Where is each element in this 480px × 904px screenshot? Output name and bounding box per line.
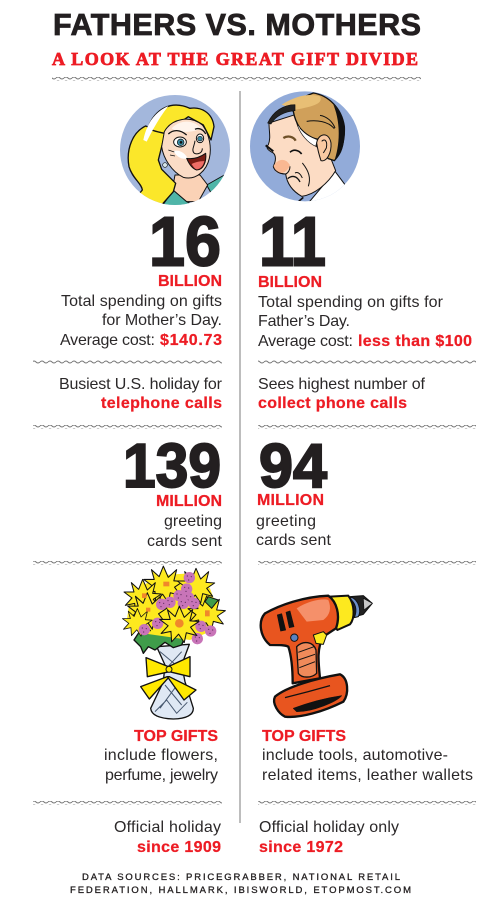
- data sources: FEDERATION, HALLMARK, IBISWORLD, ETOPMOST.COM: [70, 885, 411, 896]
- stat: father spending: Total spending on gifts for: [258, 294, 444, 311]
- stat: father spending: 11: [259, 202, 326, 280]
- text: father top gifts: TOP GIFTS: [262, 728, 346, 745]
- stat: father spending: less than $100: [358, 333, 472, 350]
- text: mother official holiday: Official holiday: [114, 819, 221, 836]
- text: father phone calls: collect phone calls: [258, 395, 407, 412]
- stat: mother greeting cards: [123, 432, 223, 550]
- stat: mother greeting cards: MILLION: [156, 493, 222, 510]
- text: mother official holiday: since 1909: [137, 839, 221, 856]
- stat: mother spending: BILLION: [158, 273, 222, 290]
- stat: mother spending: 16: [149, 202, 221, 280]
- stat: mother greeting cards: 139: [123, 432, 221, 501]
- center divider: [239, 91, 241, 823]
- text: mother top gifts: perfume, jewelry: [105, 767, 218, 784]
- subtitle: A LOOK AT THE GREAT GIFT DIVIDE: [52, 49, 418, 69]
- text: father phone calls: Sees highest number of: [258, 376, 426, 393]
- text: mother official holiday: [114, 819, 221, 856]
- stat: mother greeting cards: greeting: [164, 513, 222, 530]
- text: mother top gifts: include flowers,: [104, 747, 218, 764]
- text: father top gifts: related items, leather wallets: [262, 767, 473, 784]
- stat: mother spending: $140.73: [160, 332, 222, 349]
- stat: father spending: Average cost:: [258, 333, 353, 350]
- text: father official holiday: [259, 819, 399, 856]
- stat: father spending: [258, 202, 472, 350]
- text: mother phone calls: telephone calls: [101, 395, 222, 412]
- text: mother top gifts: [104, 728, 218, 784]
- text: father official holiday: since 1972: [259, 839, 343, 856]
- icon: mother portrait: [120, 95, 235, 210]
- text: father top gifts: include tools, automotive-: [262, 747, 448, 764]
- stat: mother spending: Total spending on gifts: [61, 293, 222, 310]
- text: father phone calls: [258, 376, 426, 412]
- stat: father spending: Father’s Day.: [258, 313, 350, 330]
- title: FATHERS VS. MOTHERS: [53, 8, 421, 42]
- stat: father greeting cards: cards sent: [256, 532, 332, 549]
- icon: flower bouquet in vase: [122, 566, 225, 719]
- icon: father portrait: [250, 91, 360, 205]
- text: father official holiday: Official holiday only: [259, 819, 399, 836]
- stat: mother spending: for Mother’s Day.: [102, 312, 222, 329]
- stat: father greeting cards: [256, 432, 332, 549]
- stat: mother spending: Average cost:: [60, 332, 155, 349]
- stat: father greeting cards: MILLION: [257, 492, 324, 509]
- text: father top gifts: [262, 728, 473, 784]
- data sources: DATA SOURCES: PRICEGRABBER, NATIONAL RETAIL: [82, 872, 400, 883]
- stat: father spending: BILLION: [258, 274, 322, 291]
- stat: father greeting cards: 94: [259, 432, 328, 501]
- stat: mother spending: [60, 202, 222, 349]
- stat: mother greeting cards: cards sent: [147, 533, 223, 550]
- text: mother top gifts: TOP GIFTS: [134, 728, 218, 745]
- stat: father greeting cards: greeting: [256, 513, 316, 530]
- text: mother phone calls: Busiest U.S. holiday for: [59, 376, 223, 393]
- icon: power drill: [261, 596, 372, 717]
- data sources: [70, 872, 411, 896]
- text: mother phone calls: [59, 376, 223, 412]
